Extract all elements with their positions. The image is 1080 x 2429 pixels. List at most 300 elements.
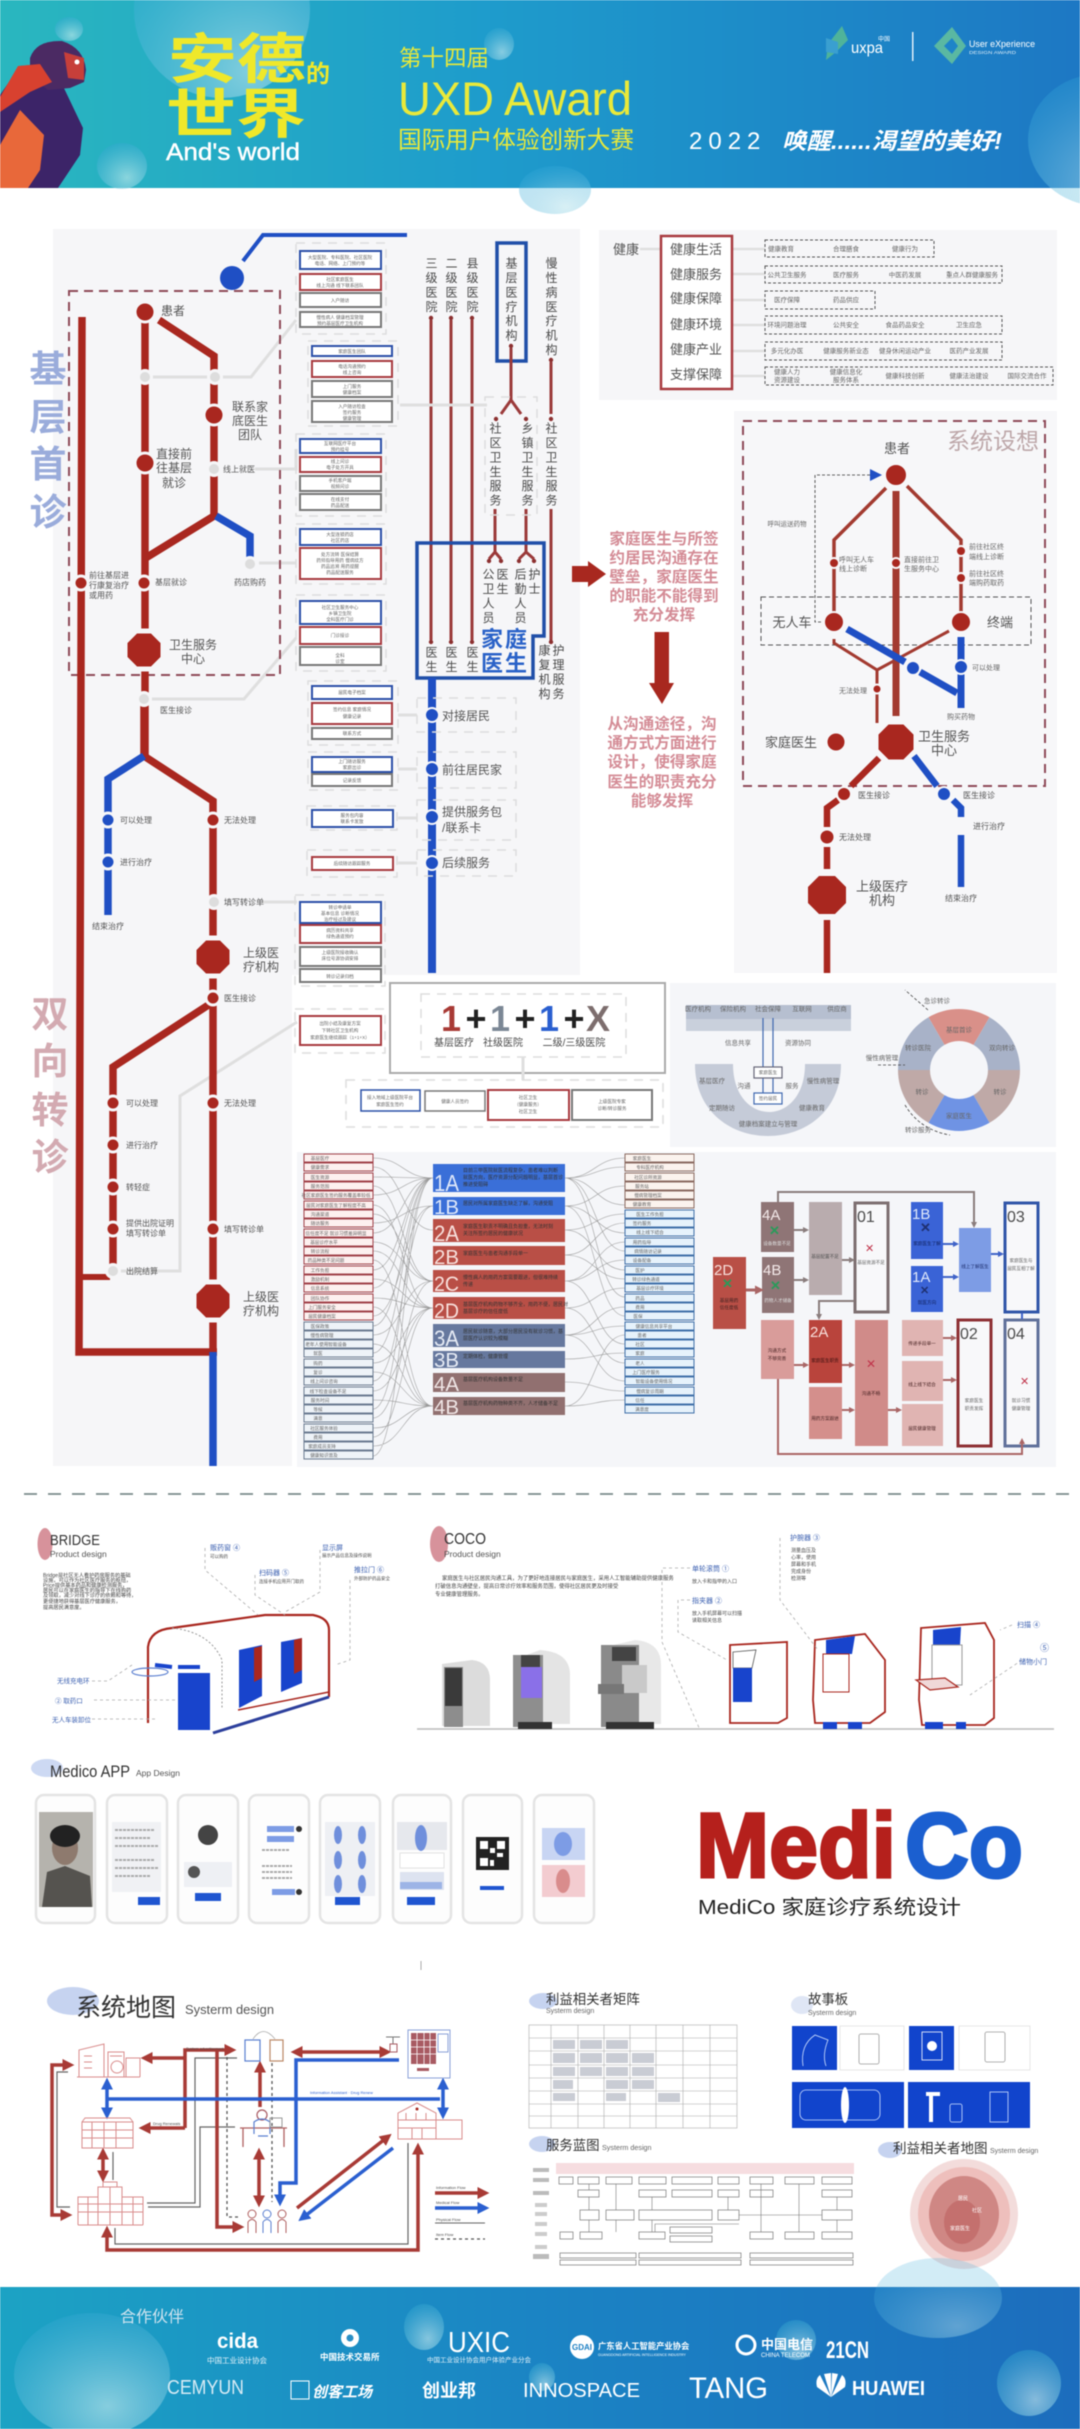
left note column	[302, 1154, 373, 1459]
heading: 双向转诊: 双	[32, 994, 68, 1035]
heading: 双向转诊: 诊	[32, 1137, 70, 1178]
heading: 基层首诊: 层	[30, 397, 66, 438]
frame 5	[792, 2082, 904, 2128]
pink cards: 沟通方式	[768, 1347, 787, 1354]
card group 3: 视频问诊	[331, 483, 350, 490]
concept labels: 终端	[987, 615, 1013, 630]
card 1A: 就医方向	[918, 1299, 937, 1306]
sub-item row 2: 中医药发展	[889, 270, 922, 279]
heading	[529, 2136, 652, 2153]
card 04: 04	[1007, 1326, 1025, 1343]
card 4A: 设备数量不足	[763, 1240, 791, 1247]
card 4A: 4A	[762, 1207, 780, 1224]
station labels: 上级医	[243, 1290, 279, 1304]
sub-item row 5: 健身休闲运动产业	[879, 346, 932, 355]
pink cards: 用药方案跟进	[811, 1415, 839, 1422]
logo: GDAI: 广东省人工智能产业协会	[598, 2341, 690, 2351]
family doctor box: 医生	[424, 646, 438, 675]
card group 4: 药师指导用药 慢病续方	[316, 557, 364, 564]
heading: 系统设想: 系统设想	[947, 428, 1039, 454]
left note column: 健康需求	[311, 1164, 330, 1171]
bar labels	[685, 1004, 847, 1013]
label: 康复机构: 康复机构	[537, 643, 551, 702]
heading: Medico APP: App Design	[136, 1768, 180, 1778]
pink cards: 家庭医生职责	[811, 1357, 839, 1364]
heading: COCO: COCO	[444, 1531, 486, 1548]
station labels: 填写转诊单	[126, 1228, 166, 1238]
left note column: 等候	[313, 1406, 323, 1413]
insight text: solution	[607, 714, 717, 810]
card 03: 03	[1007, 1209, 1025, 1226]
top bar	[686, 1005, 851, 1031]
family doctor box: 家	[481, 627, 503, 652]
station labels: 出院结算	[126, 1266, 158, 1276]
frame 6	[908, 2082, 1030, 2128]
card 4B: 基层医疗机构药物种类不齐，人才储备不足	[463, 1400, 558, 1407]
heading: 系统地图	[47, 1987, 274, 2022]
logo: 创客工场	[291, 2381, 374, 2401]
formula labels	[434, 1036, 605, 1049]
U labels: 基层医疗	[699, 1076, 726, 1085]
heading: 合作伙伴: 合作伙伴	[120, 2308, 184, 2326]
description: 打破信息沟通壁垒，提高日常诊疗效率和服务范围，使得社区居民更及时接受	[435, 1582, 619, 1590]
line stops	[429, 316, 553, 644]
lower blue route	[914, 756, 961, 887]
connector	[522, 1057, 524, 1080]
card 1A: 1A	[434, 1170, 460, 1196]
section divider	[24, 1493, 1070, 1495]
station labels: 进行治疗	[120, 857, 152, 867]
flow labels: Information Assistant · Drug Renew	[310, 2090, 373, 2095]
card 04: ✕	[1020, 1376, 1029, 1388]
card 4A: 基层医疗机构设备数量不足	[463, 1376, 523, 1383]
card 1A: 推进受阻碍	[463, 1181, 488, 1188]
card group 9: 后续随访跟踪服务	[334, 860, 371, 867]
station labels: 往基层	[156, 460, 192, 475]
callouts: 放入卡和指甲的入口	[692, 1578, 737, 1585]
segment labels: 基层首诊	[946, 1025, 972, 1034]
callouts: ② 取药口	[55, 1696, 83, 1705]
blueprint links	[589, 2184, 837, 2232]
right connecting curves	[565, 1158, 625, 1406]
octagon: 卫生服务中心	[877, 723, 915, 761]
left note column: 线下检查设备不足	[310, 1388, 347, 1395]
segment labels	[866, 996, 1016, 1134]
card group 5: 乡镇卫生院	[329, 610, 352, 617]
family doctor branch	[144, 320, 214, 559]
heading: COCO	[430, 1526, 501, 1562]
donut service chart	[866, 990, 1020, 1135]
segment lower right	[974, 1070, 1020, 1123]
main line	[141, 312, 149, 756]
segment labels: 转诊	[994, 1087, 1007, 1096]
grey information flows	[57, 2058, 408, 2244]
illustration: bridge kiosk	[132, 1615, 329, 1733]
card 2D	[433, 1297, 568, 1323]
centre box 2	[754, 1093, 782, 1104]
left note column: 随访服务	[311, 1220, 330, 1227]
label: drug delivery: 呼叫运送药物	[768, 519, 807, 528]
left note column: 费用	[313, 1434, 323, 1441]
red service flows	[52, 2050, 418, 2250]
family doctor box: 公卫人员	[481, 568, 495, 626]
sub-item row 4: 卫生应急	[956, 320, 982, 329]
card group 7: 记录反馈	[343, 777, 362, 784]
logo: MediCo: Co	[905, 1795, 1023, 1897]
sub-item row 2: 医疗服务	[833, 270, 860, 279]
card group 4: 大型连锁药店	[326, 531, 354, 538]
family doctor service line: 对接居民	[442, 708, 490, 723]
bar labels: 供应商	[827, 1004, 847, 1013]
station labels: 提供出院证明	[126, 1218, 174, 1228]
family doctor box: 庭	[505, 627, 527, 652]
station labels: 疗机构	[243, 1303, 279, 1318]
right note column: 线上线下结合	[636, 1229, 664, 1236]
right note column	[625, 1154, 694, 1413]
card 1B	[911, 1202, 943, 1259]
card group 1: 社区家庭医生	[326, 276, 354, 283]
segment bottom	[928, 1095, 990, 1131]
card group 10: 转诊记录归档	[326, 973, 354, 980]
card 4A	[761, 1202, 794, 1252]
phone 1: photo	[36, 1795, 95, 1923]
second hospital branch	[113, 1002, 213, 1275]
formula: X	[586, 998, 610, 1039]
insight text: problem: 家庭医生与所签	[609, 529, 719, 548]
card 3B: 定期体检，健康管理	[463, 1353, 508, 1360]
baseline	[417, 1728, 1054, 1730]
pink cards: 传递手段单一	[908, 1340, 936, 1347]
station labels: 就诊	[162, 476, 186, 490]
card group 4: 药品配送服务	[326, 569, 354, 576]
card 1B: 1B	[434, 1197, 459, 1219]
pink cards: 不够完善	[768, 1355, 787, 1362]
card 2B: 家庭医生与患者沟通手段单一	[463, 1250, 528, 1257]
icon: blue arrow	[870, 469, 882, 481]
dashed community service box	[485, 397, 537, 515]
logo: cida: cida	[217, 2330, 258, 2353]
card 03	[1005, 1203, 1038, 1312]
callouts: 无人车装卸位	[52, 1715, 92, 1724]
top band	[556, 2163, 854, 2174]
station labels: 前往基层进	[89, 570, 129, 580]
footer banner	[0, 2258, 1080, 2429]
left note column: 复诊	[313, 1369, 323, 1376]
concept labels: 呼叫无人车	[839, 555, 874, 564]
heading: BRIDGE	[38, 1528, 107, 1560]
right note column: 服务站	[635, 1183, 649, 1190]
card group 2: 健康档案	[343, 389, 362, 396]
sub-item row 3: 药品供应	[833, 295, 860, 304]
U arc	[695, 1064, 841, 1136]
panel: affinity background	[297, 1152, 1056, 1467]
card 2D: ✕	[722, 1276, 733, 1291]
dotted flows	[227, 2057, 272, 2217]
heading: 基层首诊: 诊	[30, 492, 68, 533]
1+1+1+X model	[346, 983, 665, 1127]
station labels: 医生接诊	[224, 993, 256, 1003]
role cards: 诊断/转诊服务	[598, 1105, 627, 1112]
concept labels: 线上诊断	[839, 564, 867, 573]
card 02: 家庭医生	[965, 1397, 984, 1404]
label: 慢性病医疗机构: 慢性病医疗机构	[544, 257, 558, 358]
logo: China Telecom	[737, 2336, 813, 2359]
role cards	[361, 1090, 652, 1120]
card 4B: 4B	[763, 1262, 781, 1279]
pink cards: 线上线下结合	[908, 1381, 936, 1388]
card 4B	[762, 1257, 794, 1313]
U labels: 服务	[786, 1081, 799, 1090]
card group 2: 健康管理	[343, 415, 362, 422]
left note column: 团队协作	[311, 1295, 330, 1302]
right note column: 设备配备	[633, 1257, 652, 1264]
concept labels: 卫生服务	[918, 729, 970, 744]
label: 健康: 健康	[613, 242, 639, 257]
connecting curves	[373, 1158, 433, 1456]
card group 3: 电子处方开具	[326, 464, 354, 471]
sub-item row 1	[765, 240, 934, 257]
table cell blocks	[553, 2040, 680, 2102]
card 02: 职责发挥	[965, 1405, 984, 1412]
sub-item row 6	[765, 367, 1053, 385]
callouts: 储物小门	[1019, 1657, 1047, 1666]
description: Bridge是社区无人看护药房服务的基础	[43, 1571, 131, 1579]
formula	[441, 998, 610, 1039]
logo: GDAI: GUANGDONG ARTIFICIAL INTELLIGENCE INDUSTRY	[598, 2353, 687, 2357]
bar labels: 保险机构	[720, 1004, 746, 1013]
sub-item row 6: 健康科技创新	[886, 371, 925, 380]
concept labels: 机构	[869, 893, 895, 908]
insight text: problem: 充分发挥	[633, 605, 696, 624]
card group 10: 治疗经过及建议	[324, 916, 356, 923]
U labels: 慢性病管理	[807, 1076, 840, 1085]
family doctor service line	[398, 678, 516, 973]
icon: residents	[248, 2210, 286, 2233]
segment lower left	[898, 1070, 944, 1123]
left note column: 医生资源	[311, 1174, 330, 1181]
outline: COCO tray	[916, 1623, 994, 1729]
sub-item row 5: 医药产业发展	[950, 346, 989, 355]
right note column: 老人	[635, 1360, 645, 1366]
icon: community hospital	[82, 2118, 133, 2148]
family doctor box: 医生	[444, 646, 458, 675]
concept labels: 前往社区终	[969, 569, 1004, 578]
left note column: 社区家庭医生签约服务覆盖率较低	[302, 1192, 371, 1199]
heading: 基层首诊: 基	[30, 349, 66, 390]
role cards: 家庭医生签约	[376, 1101, 404, 1108]
pink cards: ✕	[866, 1357, 876, 1371]
heading: COCO: Product design	[444, 1549, 501, 1559]
concentric circles	[910, 2159, 1018, 2269]
blue medicine flows	[107, 2060, 443, 2216]
callouts: 无线充电环	[57, 1676, 90, 1685]
logos: uxpa and UXD: User eXperience	[969, 39, 1035, 50]
legend: Medical Flow	[436, 2200, 459, 2205]
right note column: 病情随访记录	[634, 1248, 662, 1255]
right note column: 家庭医生	[633, 1155, 652, 1162]
card 02	[958, 1320, 991, 1446]
family doctor box: 医	[481, 651, 503, 676]
heading: 系统地图: Systerm design	[185, 2002, 274, 2017]
logos: uxpa and UXD: 中国	[878, 35, 890, 43]
icon: phones	[245, 2032, 283, 2061]
left note column: 购药	[313, 1360, 323, 1367]
label: 患者: 患者	[884, 441, 910, 456]
logo: China Telecom: CHINA TELECOM	[761, 2353, 810, 2359]
logos: uxpa and UXD	[826, 26, 1035, 64]
concept labels: 无法处理	[839, 832, 871, 842]
station labels: 转轻症	[126, 1182, 150, 1192]
logos: uxpa and UXD: DESIGN AWARD	[969, 50, 1017, 55]
icon: community shops	[77, 2044, 140, 2077]
frame 2	[840, 2026, 904, 2070]
phone 5: body grid	[320, 1795, 380, 1923]
card 2D: 基层诊疗的信任度低	[463, 1308, 508, 1315]
description: 居民可以在家庭医生的指导下在线购药	[43, 1586, 131, 1594]
logos: uxpa and UXD: uxpa	[851, 40, 883, 57]
connector from cards	[400, 404, 487, 406]
card group 4: 药品追溯 用药提醒	[321, 563, 359, 570]
callouts: 护腕器 ③	[790, 1533, 820, 1542]
label: 县级医院: 县级医院	[465, 257, 479, 315]
slogan: 唤醒......渴望的美好!	[782, 128, 1002, 154]
callouts: 指夹器 ②	[692, 1596, 722, 1605]
left note column: 医保政策	[311, 1323, 330, 1330]
card 2D: 基层用药	[720, 1297, 739, 1304]
concept labels: 上级医疗	[856, 879, 908, 894]
icon: start station	[220, 266, 244, 290]
arrow: down to solution	[649, 632, 674, 704]
card 3A: 3A	[434, 1326, 459, 1351]
centre box 1: 家庭医生	[759, 1069, 778, 1076]
family doctor service line: /联系卡	[442, 821, 481, 835]
card 4A	[433, 1373, 565, 1396]
card 04: 健康管理	[1012, 1405, 1031, 1412]
sub-item row 2: 公共卫生服务	[768, 270, 807, 279]
heading: 基层首诊	[30, 349, 68, 533]
heading: BRIDGE: Product design	[50, 1549, 107, 1559]
card group 3: 互联网医疗平台	[324, 440, 356, 447]
segment labels: 转诊医院	[905, 1043, 932, 1052]
dashed drone call line	[815, 475, 870, 622]
description: 设施，可以作为社区医疗服务的枢纽，	[43, 1576, 131, 1584]
sub-item row 6: 国际交流合作	[1008, 371, 1047, 380]
right note column: 专科医疗机构	[636, 1164, 664, 1171]
description: 更便捷地获得基层医疗健康服务，	[43, 1597, 121, 1605]
station labels: 可以处理	[126, 1098, 158, 1108]
right note column: 医保	[633, 1313, 643, 1320]
description	[43, 1571, 136, 1611]
U labels: 沟通	[738, 1081, 751, 1090]
right note column: 满意度	[635, 1406, 649, 1413]
station labels: 患者	[161, 304, 185, 318]
card grey summary: 基层配置不足	[811, 1253, 839, 1260]
header banner	[0, 0, 1080, 214]
card 1A: 1A	[912, 1269, 930, 1286]
card 4A: ✕	[769, 1223, 780, 1238]
card light blue: 线上了解医生	[961, 1263, 989, 1270]
left note column: 家庭成员支持	[308, 1443, 336, 1450]
right note column: 转诊绿色通道	[632, 1276, 660, 1283]
station labels: 团队	[238, 427, 262, 442]
formula labels: 社级医院	[483, 1036, 523, 1049]
heading: UXD Award: 国际用户体验创新大赛	[398, 127, 634, 154]
sub-item row 3: 医疗保障	[774, 295, 800, 304]
card 01: 01	[857, 1209, 875, 1226]
concept labels: 前往社区终	[969, 542, 1004, 551]
role cards: 社区卫生	[519, 1094, 538, 1101]
logo: cida	[207, 2330, 267, 2365]
lower red station	[820, 830, 834, 844]
card group 3: 在线支付	[331, 496, 350, 503]
left note column: 线上问诊咨询	[310, 1378, 338, 1385]
category box: 健康环境	[670, 317, 722, 332]
sub-item row 1: 合理膳食	[833, 244, 860, 253]
left note column: 慢性病管理	[311, 1332, 334, 1339]
decorative planets	[55, 0, 1080, 214]
card group 11: 下转社区卫生机构	[322, 1027, 359, 1034]
product renders	[442, 1640, 661, 1729]
system concept map	[743, 421, 1045, 973]
station labels: 填写转诊单	[224, 897, 264, 907]
panel: lower right analysis background	[670, 983, 1056, 1147]
second hospital line	[209, 1002, 217, 1352]
logo: MediCo	[696, 1795, 1023, 1919]
COCO product	[417, 1526, 1054, 1730]
role cards: 接入地域上级医院平台	[367, 1094, 413, 1101]
card 4B	[433, 1397, 565, 1419]
description	[435, 1574, 674, 1598]
station labels: 医生接诊	[160, 705, 192, 715]
formula: +	[514, 998, 536, 1039]
formula: +	[563, 998, 585, 1039]
heading: UXD Award: 第十四届	[399, 46, 489, 71]
right note column: 健康信息共享平台	[636, 1323, 673, 1330]
right note column: 慢病管理档案	[634, 1192, 662, 1199]
card group 10: 上级医院接收确认	[322, 949, 359, 956]
callouts: 读取相关信息	[692, 1617, 722, 1624]
pink cards: 2A	[810, 1324, 828, 1341]
station labels: 基层就诊	[155, 577, 187, 587]
dashed system boundary	[743, 421, 1045, 786]
insight text: solution: 医生的职责充分	[607, 772, 717, 791]
centre box 2: 签约居民	[759, 1095, 778, 1102]
hub stations	[125, 631, 232, 1320]
concentric circles: 家庭医生	[950, 2225, 970, 2232]
card 03: 居民互相了解	[1007, 1265, 1035, 1272]
left note column: 满意	[313, 1415, 323, 1422]
callouts: 推拉门 ⑥	[354, 1565, 384, 1574]
left note column: 基层医疗	[311, 1155, 330, 1162]
card 2A: 关注所签约居民的健康状况	[463, 1230, 523, 1237]
dashed inner box	[421, 994, 626, 1057]
card 2D	[713, 1257, 746, 1329]
stations	[74, 302, 256, 1278]
card 2C: 慢性病人的用药方案需要跟进，但很难持续	[463, 1274, 558, 1281]
journey subway map	[69, 235, 407, 1466]
formula: +	[465, 998, 487, 1039]
card 4B: 药物人才储备	[764, 1297, 792, 1304]
family doctor box: 生	[505, 651, 527, 676]
card 1B: 家庭医生了解	[913, 1240, 941, 1247]
right note column: 家庭	[635, 1350, 645, 1357]
icon: doctor at desk	[240, 2110, 287, 2147]
station labels: 或用药	[89, 590, 113, 600]
arrow: right to insight	[572, 561, 606, 587]
segment upper left	[898, 1017, 944, 1070]
panel: system concept background	[734, 411, 1057, 973]
legend	[435, 2185, 485, 2239]
